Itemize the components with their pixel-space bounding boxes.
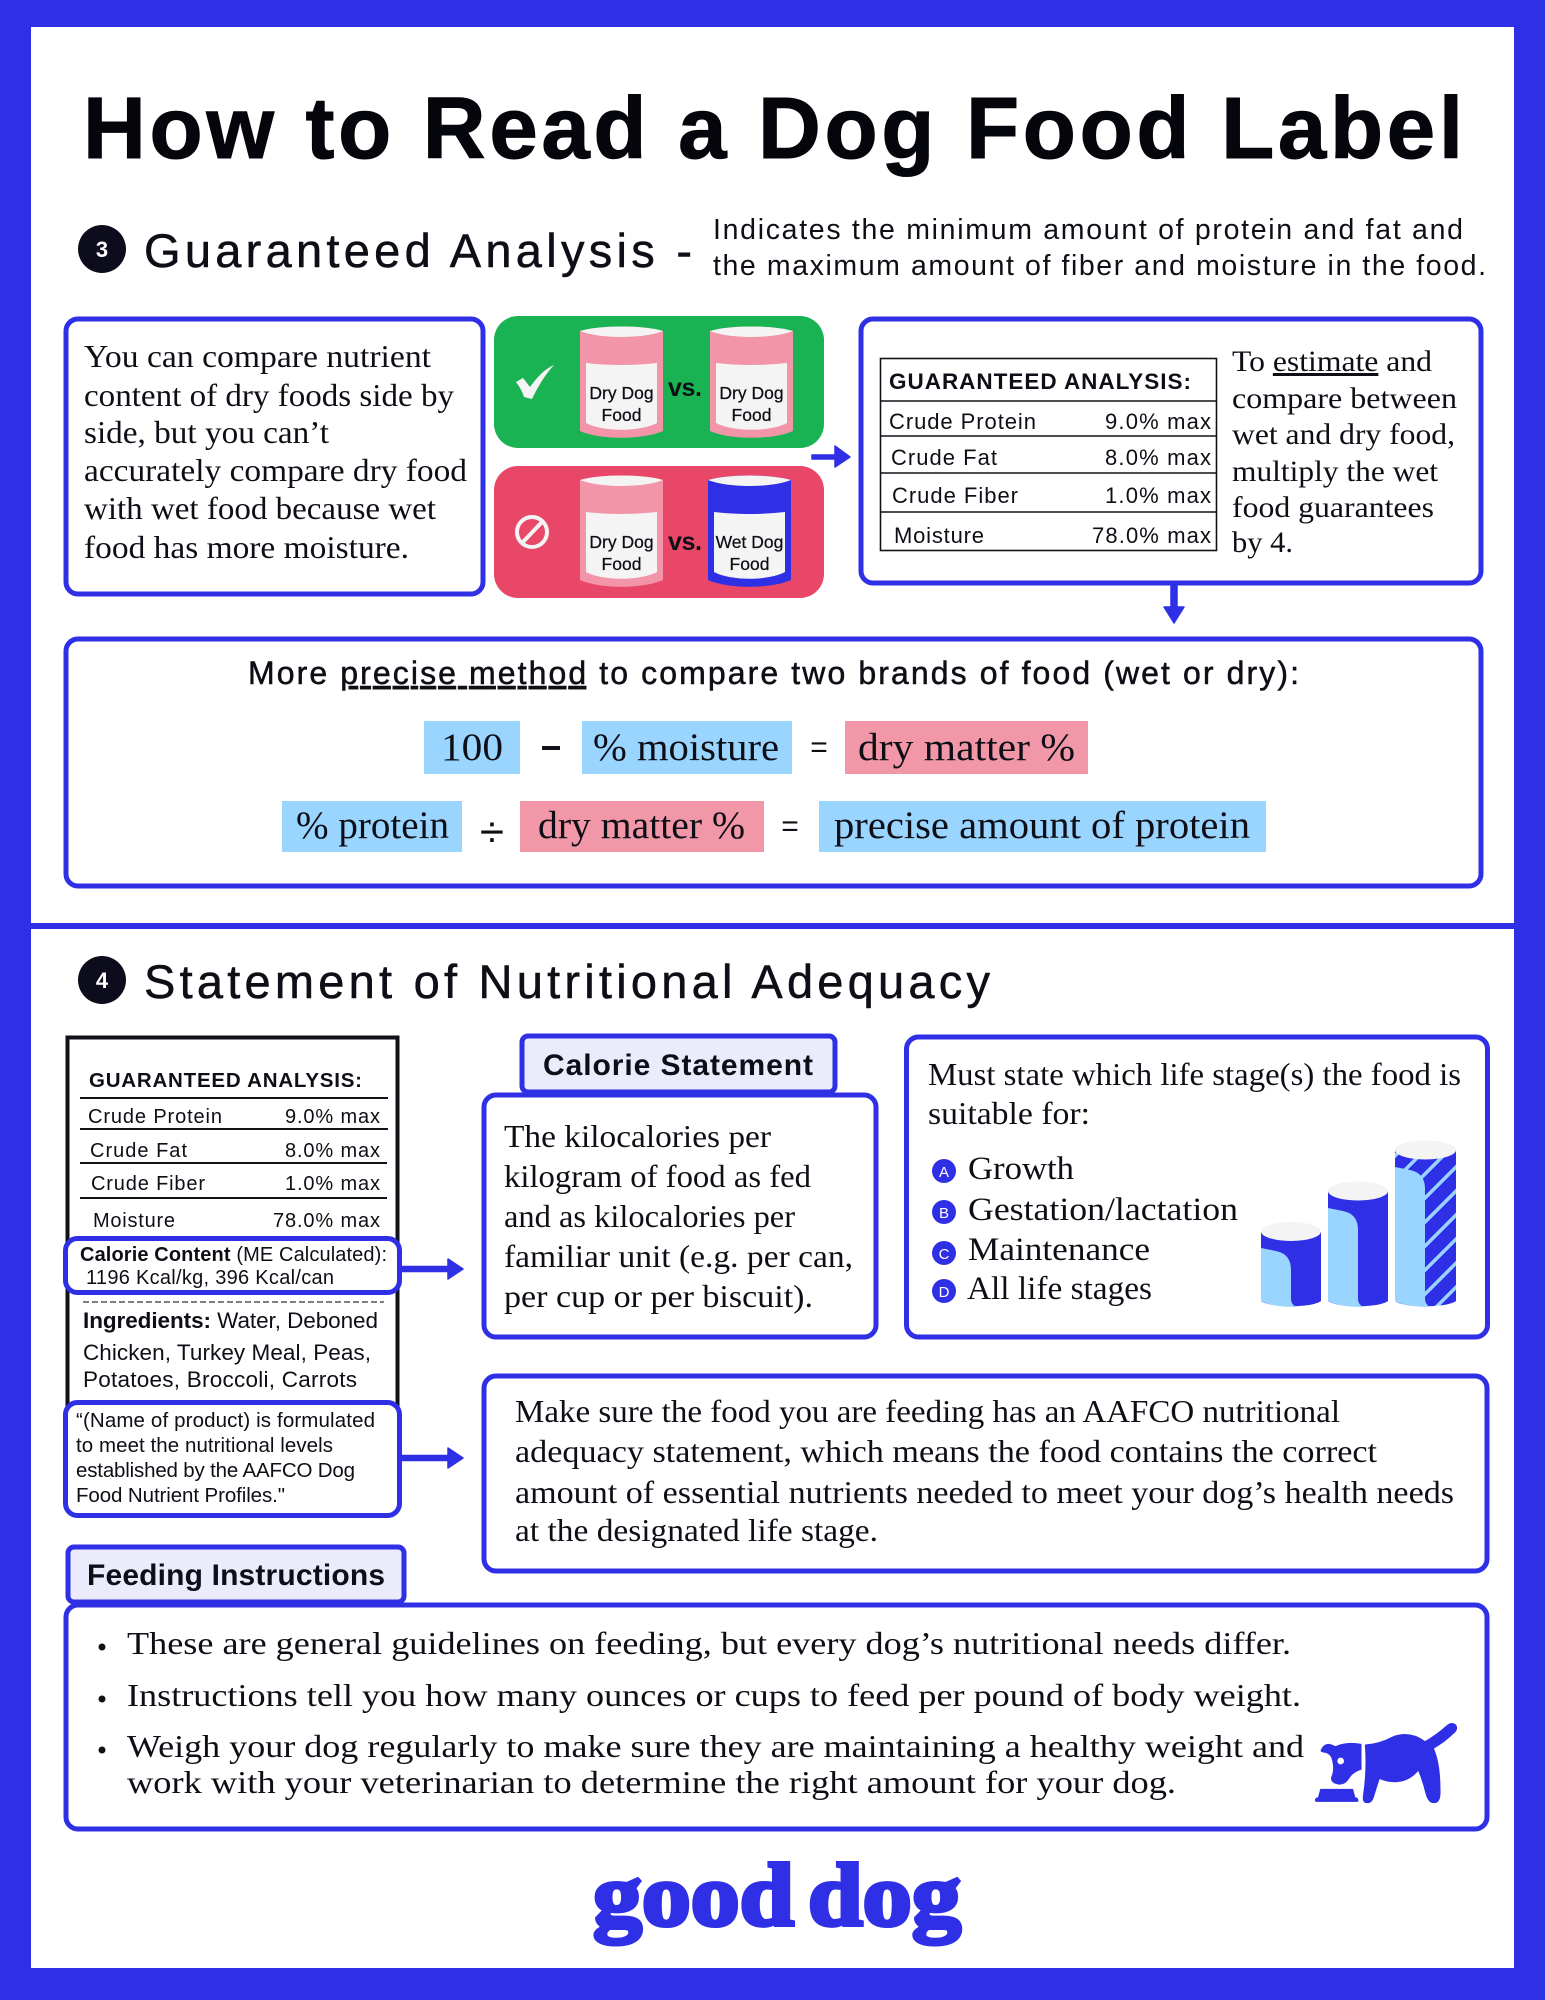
panel: calorie statement: and as kilocalories per — [504, 1198, 795, 1234]
food label: 78.0% max — [273, 1210, 380, 1232]
heading: statement of nutritional adequacy: Statement of Nutritional Adequacy — [144, 955, 990, 1008]
text: ingredients: Potatoes, Broccoli, Carrots — [83, 1367, 357, 1392]
badge: 3: 3 — [96, 237, 108, 262]
food label: Crude Fat — [90, 1140, 187, 1162]
callout: aafco statement: established by the AAFCO Dog — [76, 1459, 355, 1482]
text: estimate note: To estimate and — [1232, 345, 1432, 378]
tab: calorie statement — [522, 1036, 835, 1092]
list: life stages: A — [939, 1164, 949, 1181]
panel: aafco explanation — [484, 1376, 1487, 1571]
badge: 3 — [78, 225, 126, 273]
food label — [68, 1038, 398, 1410]
formula: dry matter: 100 — [441, 726, 503, 769]
heading description: the maximum amount of fiber and moisture in the food. — [713, 250, 1486, 282]
bullet list: feeding guidance — [98, 1625, 1304, 1800]
formula: dry matter: = — [810, 731, 828, 764]
formula: precise protein: dry matter % — [538, 804, 745, 847]
panel: aafco explanation: Make sure the food you are feeding has an AAFCO nutritional — [515, 1393, 1340, 1429]
text: life stage intro: Must state which life stage(s) the food is — [928, 1056, 1461, 1092]
bullet list: feeding guidance: Weigh your dog regularly to make sure they are maintaining a healthy weight and — [127, 1728, 1304, 1764]
text: compare nutrient content: food has more moisture. — [84, 529, 409, 565]
can: dry dog food: Dry Dog — [719, 383, 784, 403]
icon: prohibited — [517, 517, 547, 547]
table: guaranteed analysis: 8.0% max — [1105, 445, 1211, 470]
callout: calorie content: Calorie Content (ME Calculated): — [80, 1244, 387, 1266]
can: dry dog food — [580, 326, 663, 438]
list: life stages: C — [939, 1246, 950, 1263]
callout: aafco statement: Food Nutrient Profiles." — [76, 1484, 285, 1507]
list: life stages: Growth — [968, 1151, 1075, 1187]
panel: dry vs wet not ok — [494, 466, 824, 598]
title: How to Read a Dog Food Label — [83, 80, 1463, 177]
text: compare nutrient content: with wet food because wet — [84, 490, 436, 526]
food label: 8.0% max — [285, 1140, 380, 1162]
formula: precise protein: precise amount of protein — [834, 804, 1250, 847]
label: vs: vs. — [668, 374, 702, 402]
panel: life stages — [906, 1037, 1488, 1337]
table: guaranteed analysis: Crude Fiber — [892, 483, 1018, 508]
tab: feeding instructions: Feeding Instructions — [87, 1559, 385, 1592]
table: guaranteed analysis — [880, 358, 1217, 550]
panel: feeding instructions — [66, 1605, 1487, 1829]
can: dry dog food: Dry Dog — [589, 383, 654, 403]
can: wet dog food: Wet Dog — [716, 532, 783, 552]
callout: calorie content: 1196 Kcal/kg, 396 Kcal/can — [86, 1267, 334, 1289]
table: guaranteed analysis: Crude Protein — [889, 409, 1036, 434]
panel: compare dry foods — [66, 319, 483, 594]
icon: dog eating — [1315, 1724, 1457, 1803]
callout: aafco statement: “(Name of product) is formulated — [76, 1409, 375, 1432]
text: estimate note — [1232, 345, 1457, 559]
icon: check mark — [516, 365, 554, 399]
food label: Crude Fiber — [91, 1173, 205, 1195]
table: guaranteed analysis: 1.0% max — [1105, 483, 1211, 508]
list: life stages: Maintenance — [968, 1232, 1150, 1268]
can: dry dog food: Dry Dog — [589, 532, 654, 552]
panel: calorie statement: kilogram of food as fed — [504, 1158, 811, 1194]
food label: Crude Protein — [88, 1106, 222, 1128]
panel: aafco explanation: at the designated life stage. — [515, 1512, 878, 1548]
list: life stages: Gestation/lactation — [968, 1192, 1238, 1228]
text: ingredients: Chicken, Turkey Meal, Peas, — [83, 1340, 371, 1365]
panel: calorie statement: familiar unit (e.g. per can, — [504, 1238, 853, 1274]
tab: calorie statement: Calorie Statement — [543, 1049, 813, 1082]
badge: 4: 4 — [96, 968, 109, 993]
text: estimate note: wet and dry food, — [1232, 418, 1455, 451]
formula: dry matter: dry matter % — [858, 726, 1075, 769]
bullet list: feeding guidance: These are general guidelines on feeding, but every dog’s nutritional needs differ. — [127, 1625, 1291, 1661]
can: wet dog food — [708, 476, 791, 587]
text: estimate note: by 4. — [1232, 526, 1293, 559]
panel: aafco explanation: amount of essential nutrients needed to meet your dog’s health needs — [515, 1474, 1454, 1510]
can: wet dog food: Food — [730, 554, 769, 574]
text: compare nutrient content: You can compare nutrient — [84, 338, 431, 374]
can: dry dog food: Food — [602, 405, 641, 425]
table: guaranteed analysis: 9.0% max — [1105, 409, 1211, 434]
logo: good dog: good — [593, 1847, 794, 1945]
text: estimate note: food guarantees — [1232, 491, 1434, 524]
panel: calorie statement: The kilocalories per — [504, 1118, 771, 1154]
text: compare nutrient content: side, but you can’t — [84, 414, 329, 450]
tab: feeding instructions — [68, 1547, 404, 1602]
text: life stage intro: suitable for: — [928, 1095, 1090, 1131]
food label: Moisture — [93, 1210, 175, 1232]
panel: aafco explanation: adequacy statement, which means the food contains the correct — [515, 1433, 1377, 1469]
food label: 1.0% max — [285, 1173, 380, 1195]
can: dry dog food: Food — [602, 554, 641, 574]
section 3 heading — [78, 214, 1486, 282]
heading: precise method: More precise method to compare two brands of food (wet or dry): — [248, 655, 1299, 691]
panel: calorie statement: per cup or per biscuit). — [504, 1278, 813, 1314]
text: life stage intro — [928, 1056, 1461, 1131]
food label: GUARANTEED ANALYSIS: — [89, 1069, 362, 1092]
text: compare nutrient content: accurately compare dry food — [84, 452, 467, 488]
table: guaranteed analysis: Crude Fat — [891, 445, 997, 470]
panel: precise method — [66, 639, 1481, 886]
can: dry dog food: Food — [732, 405, 771, 425]
formula: dry matter: % moisture — [593, 726, 779, 769]
arrow: aafco statement to explanation — [402, 1448, 463, 1468]
arrow: calorie content to statement — [402, 1259, 463, 1279]
heading description — [713, 214, 1486, 282]
list: life stages: All life stages — [967, 1271, 1152, 1307]
logo: good dog: dog — [808, 1847, 961, 1945]
panel: calorie statement — [484, 1095, 876, 1337]
logo: good dog — [593, 1847, 961, 1945]
table: guaranteed analysis: 78.0% max — [1092, 523, 1211, 548]
label: vs: vs. — [668, 528, 702, 556]
callout: calorie content — [66, 1238, 400, 1292]
text: ingredients — [83, 1308, 378, 1392]
arrow: cans to analysis — [812, 446, 850, 467]
text: estimate note: compare between — [1232, 382, 1457, 415]
list: life stages — [932, 1151, 1238, 1307]
heading: guaranteed analysis: Guaranteed Analysis - — [144, 224, 692, 277]
table: guaranteed analysis: GUARANTEED ANALYSIS: — [889, 369, 1191, 394]
text: compare nutrient content: content of dry foods side by — [84, 377, 454, 413]
formula: precise protein: = — [781, 810, 799, 843]
icon: growing cans — [1261, 1140, 1456, 1307]
formula: precise protein: ÷ — [480, 808, 504, 857]
arrow: down to precise method — [1164, 585, 1184, 623]
callout: aafco statement — [66, 1402, 400, 1516]
formula: precise protein — [282, 801, 1266, 857]
list: life stages: B — [939, 1205, 949, 1222]
panel: dry vs dry ok — [494, 316, 824, 448]
formula: dry matter — [424, 721, 1088, 774]
can: dry dog food — [580, 476, 663, 587]
text: compare nutrient content — [84, 338, 467, 565]
list: life stages: D — [939, 1284, 950, 1301]
panel: estimate — [861, 319, 1481, 583]
table: guaranteed analysis: Moisture — [894, 523, 984, 548]
bullet list: feeding guidance: work with your veterinarian to determine the right amount for your dog. — [127, 1764, 1176, 1800]
food label: 9.0% max — [285, 1106, 380, 1128]
bullet list: feeding guidance: Instructions tell you how many ounces or cups to feed per pound of body weight. — [127, 1677, 1301, 1713]
formula: precise protein: % protein — [296, 804, 449, 847]
text: estimate note: multiply the wet — [1232, 455, 1439, 488]
can: dry dog food — [710, 326, 793, 438]
badge: 4 — [78, 956, 126, 1004]
section 4 heading — [78, 955, 990, 1008]
heading description: Indicates the minimum amount of protein and fat and — [713, 214, 1463, 246]
callout: aafco statement: to meet the nutritional levels — [76, 1434, 333, 1457]
text: ingredients: Ingredients: Water, Deboned — [83, 1308, 378, 1333]
